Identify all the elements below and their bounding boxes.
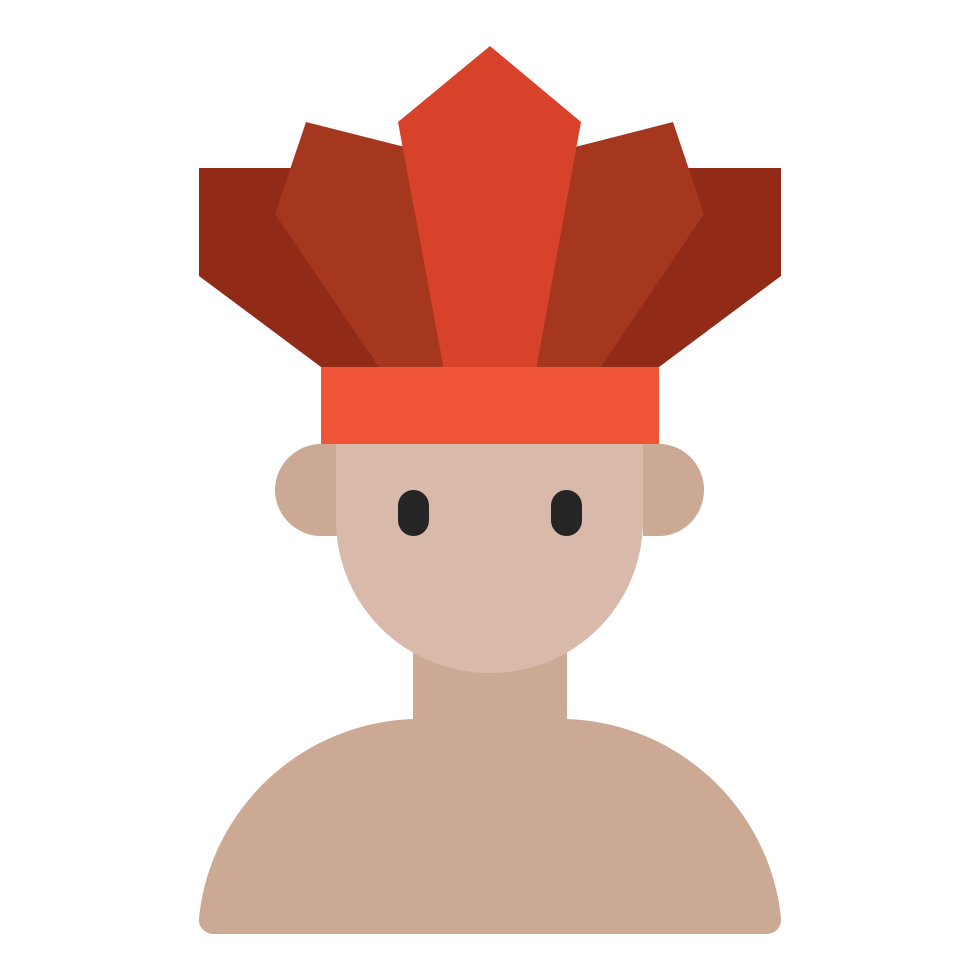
middle left feather bbox=[275, 122, 445, 370]
left ear bbox=[275, 444, 337, 536]
middle right feather bbox=[535, 122, 704, 370]
headband bbox=[321, 367, 659, 444]
body: shoulders and neck bbox=[199, 640, 781, 934]
outer left feather bbox=[199, 168, 385, 370]
outer right feather bbox=[595, 168, 781, 370]
right ear bbox=[643, 444, 704, 536]
face bbox=[336, 430, 643, 673]
center feather bbox=[398, 46, 581, 370]
right eye bbox=[551, 490, 582, 536]
left eye bbox=[398, 490, 429, 536]
